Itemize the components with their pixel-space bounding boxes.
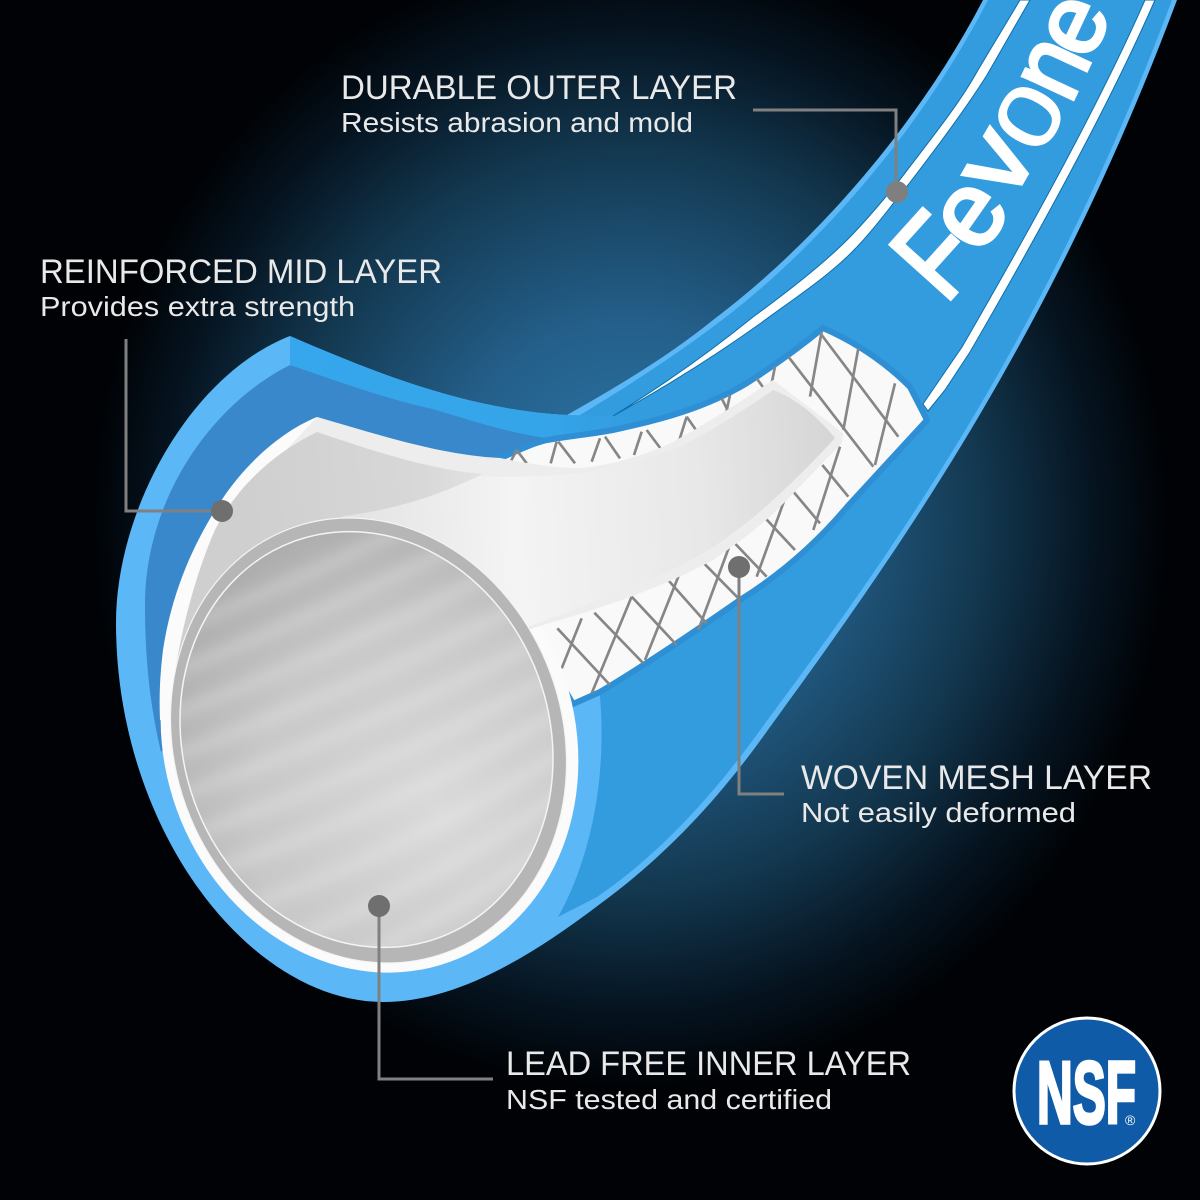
leader line: [739, 570, 784, 794]
marker dot: [368, 895, 390, 917]
badge circle: [1014, 1018, 1160, 1164]
inner bore: [179, 530, 554, 948]
Fevone logo: e: [902, 155, 1032, 270]
lower stripe: [923, 0, 1155, 411]
heading: LEAD FREE INNER LAYER: [506, 1045, 911, 1083]
subtext: NSF tested and certified: [506, 1084, 832, 1115]
registered mark: ®: [1125, 1112, 1136, 1128]
marker dot: [886, 181, 908, 203]
NSF badge: [1014, 1018, 1160, 1164]
outer layer silhouette: [116, 0, 1177, 1002]
subtext: Resists abrasion and mold: [341, 107, 693, 138]
bore base: [122, 479, 611, 1000]
top cut band: [290, 336, 640, 445]
callout: reinforced mid layer: [40, 253, 442, 522]
woven mesh layer: [480, 328, 927, 704]
reinforced mid layer inner wall: [145, 365, 545, 752]
leader line: [379, 910, 493, 1079]
inner tube rim: [200, 380, 843, 700]
Fevone logo: v: [929, 107, 1058, 214]
Fevone logo: [866, 0, 1131, 323]
heading: REINFORCED MID LAYER: [40, 253, 442, 291]
marker dot: [728, 556, 750, 578]
Fevone logo: F: [866, 189, 1005, 323]
hose cutaway illustration: [96, 0, 1177, 1040]
hose blue surface: [558, 0, 1172, 917]
callout: durable outer layer: [341, 69, 908, 203]
subtext: Provides extra strength: [40, 291, 355, 322]
marker dot: [211, 500, 233, 522]
callout: lead free inner layer: [368, 895, 911, 1115]
upper stripe: [613, 0, 1030, 416]
Fevone logo: n: [986, 18, 1114, 115]
heading: DURABLE OUTER LAYER: [341, 69, 737, 107]
inner tube surface: [175, 390, 835, 700]
lead free inner layer ring: [109, 462, 628, 1019]
subtext: Not easily deformed: [801, 797, 1076, 828]
leader line: [753, 110, 896, 190]
mesh white base: [480, 328, 927, 704]
heading: WOVEN MESH LAYER: [801, 759, 1152, 797]
white layer body: [160, 417, 520, 780]
Fevone logo: o: [952, 54, 1091, 170]
mesh grid lines: [511, 332, 898, 693]
white layer ring: [96, 448, 643, 1032]
bore ribs: [181, 535, 504, 868]
callout: woven mesh layer: [728, 556, 1152, 828]
leader line: [126, 339, 215, 511]
inner tube shaded part: [172, 432, 483, 695]
